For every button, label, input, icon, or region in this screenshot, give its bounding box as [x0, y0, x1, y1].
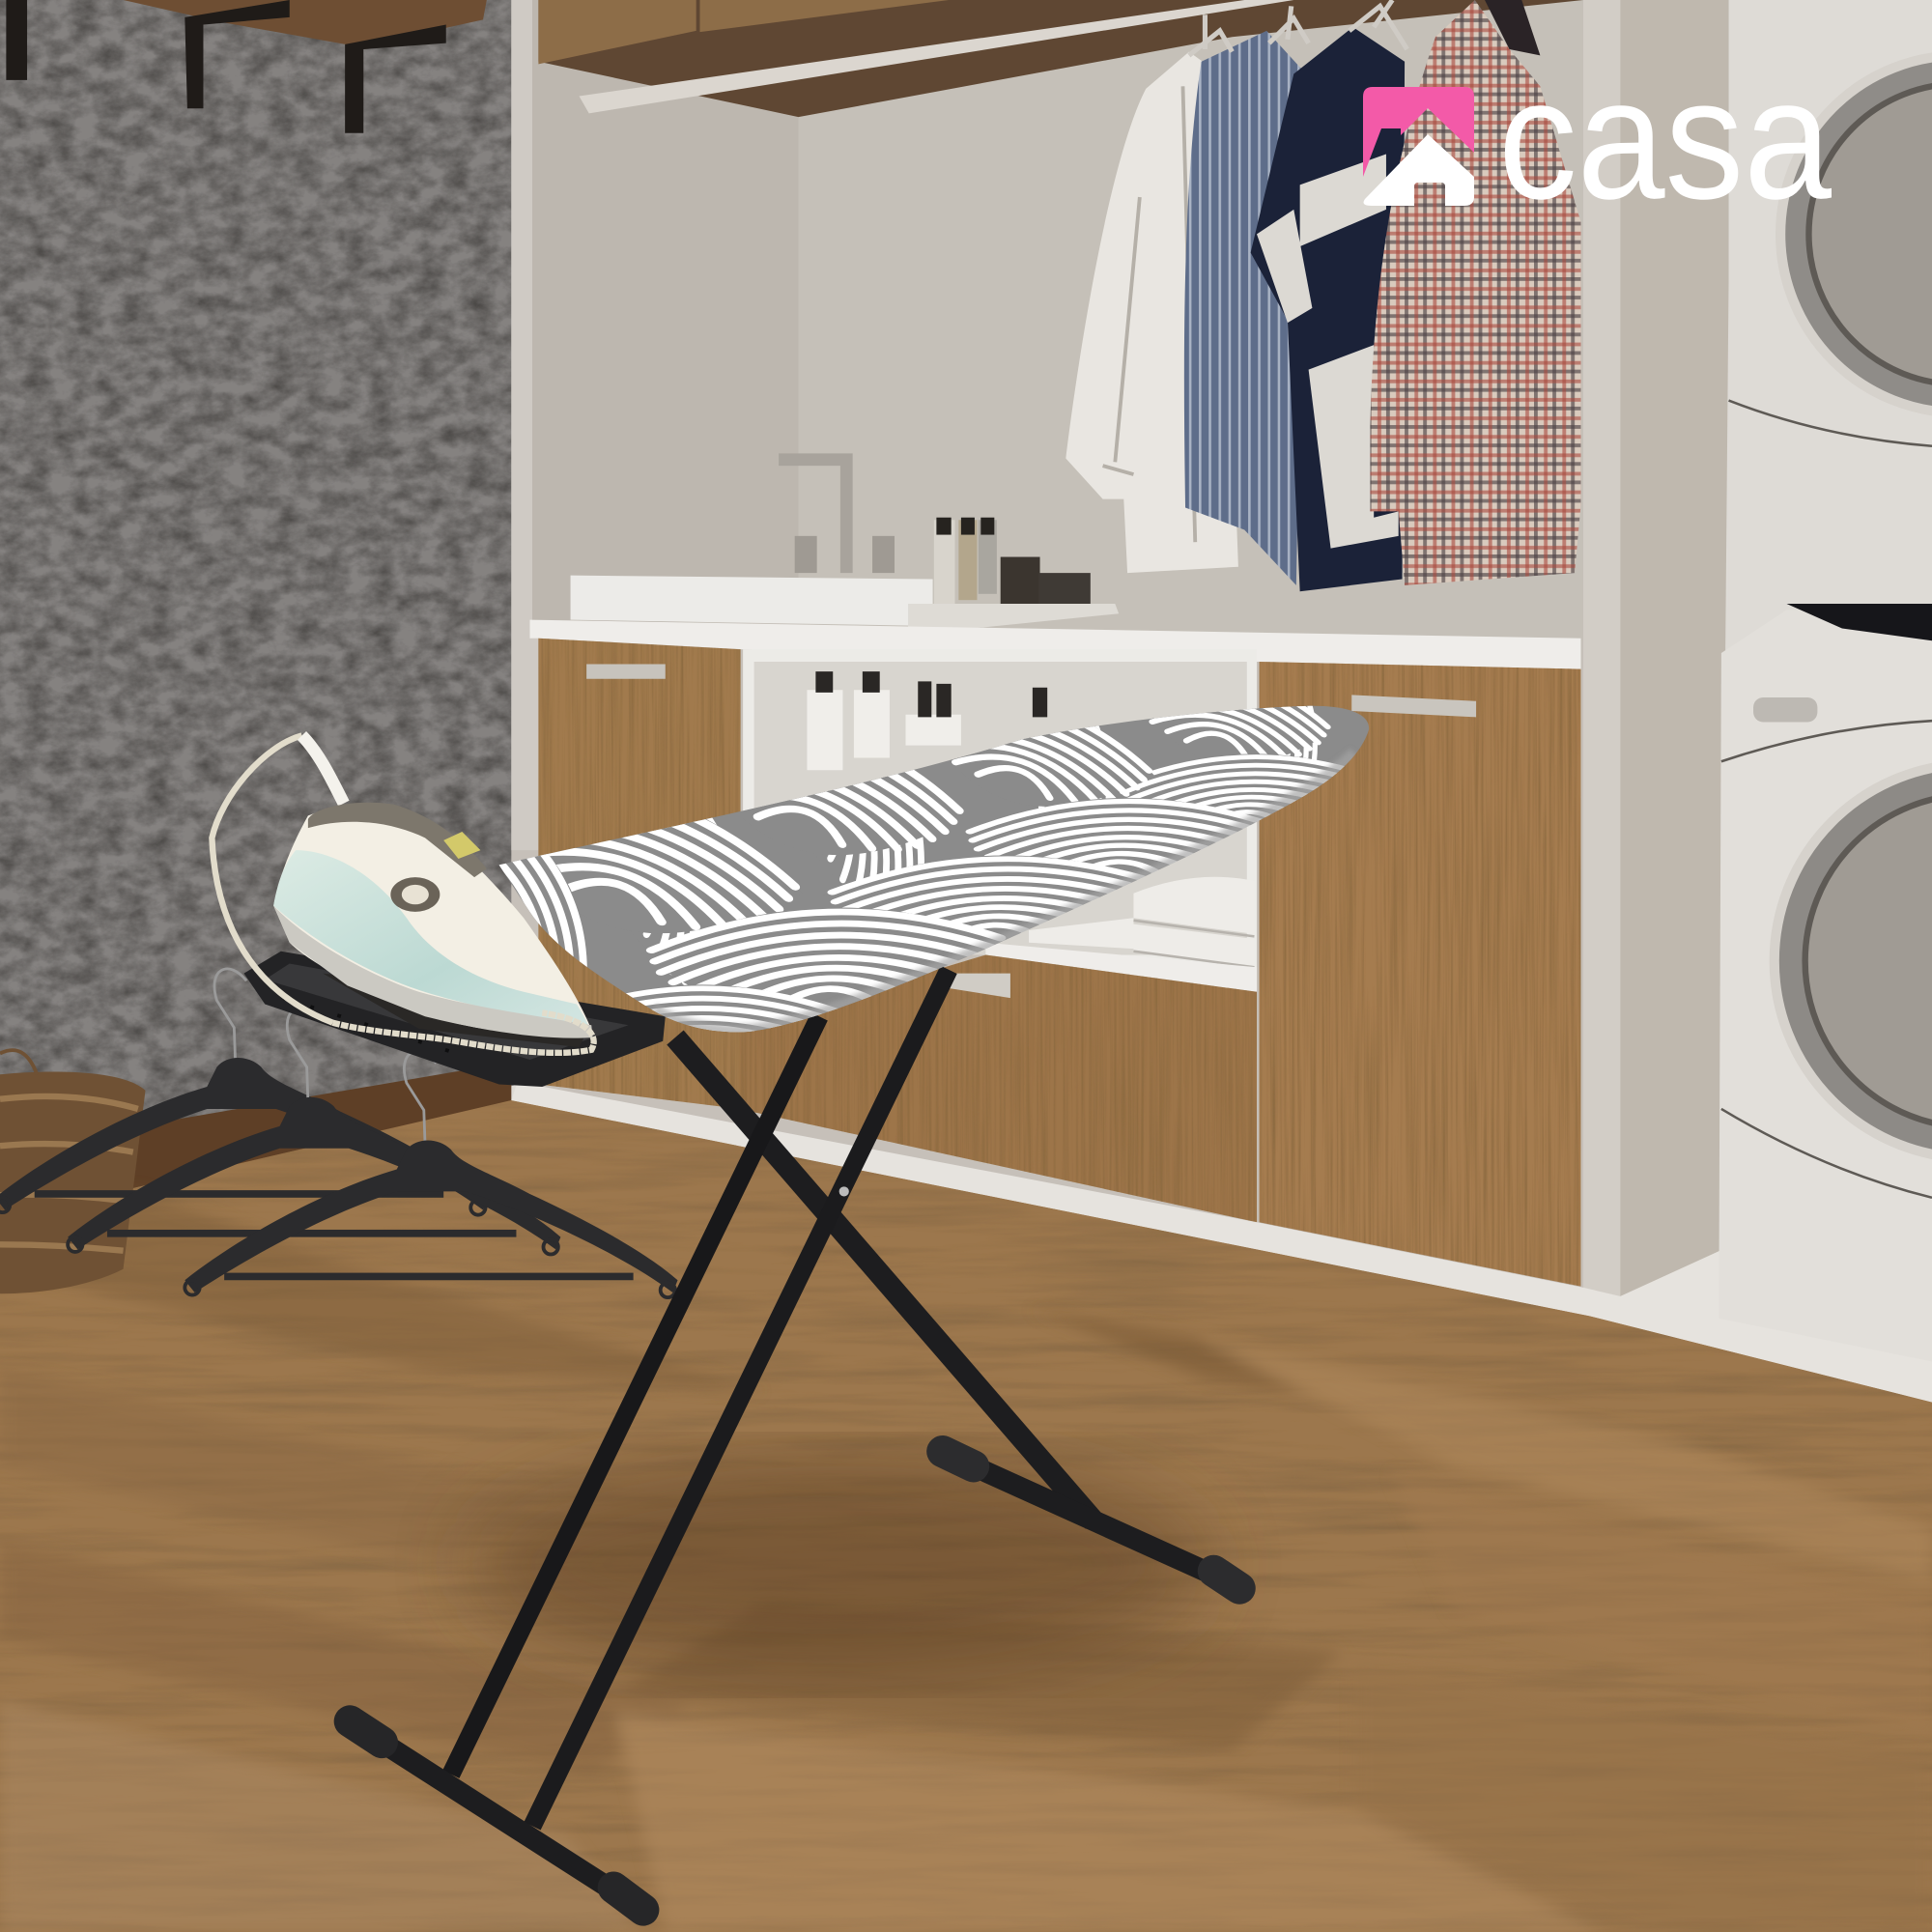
countertop: [529, 620, 1580, 669]
iron body: [273, 804, 593, 1035]
blue striped shirt: [1184, 31, 1306, 585]
upper cabinet: [538, 0, 1583, 117]
logo wordmark: casa: [1498, 43, 1832, 235]
sink and faucet: [571, 453, 933, 626]
board edge shading: [653, 754, 1355, 1032]
casa logo: [1363, 43, 1832, 235]
cord coil on rest: [332, 1012, 594, 1053]
wicker basket: [0, 1050, 146, 1293]
black hangers: [0, 969, 678, 1297]
plaid shirt: [1370, 0, 1580, 585]
clothes hangers: [1189, 0, 1407, 55]
white baseboard: [511, 1082, 1932, 1403]
wood baseboard: [129, 1062, 511, 1189]
folded towels: [1029, 877, 1254, 967]
open niche: [743, 649, 1257, 992]
temperature dial: [390, 877, 440, 912]
steam iron: [212, 735, 593, 1047]
niche bottles: [807, 690, 961, 770]
front leg right: [532, 970, 949, 1826]
bottles and tray: [908, 518, 1119, 629]
iron handle: [308, 803, 487, 877]
hanging clothes: [1065, 0, 1580, 591]
left alcove pillar: [511, 0, 538, 850]
front foot: [352, 1722, 643, 1910]
left alcove wall: [532, 0, 799, 622]
rear leg: [675, 1037, 1094, 1521]
rear foot: [947, 1454, 1233, 1583]
water tank: [273, 850, 589, 1029]
floor planks: [0, 1189, 1932, 1932]
upper washer: [1729, 0, 1932, 616]
front leg left: [451, 1016, 819, 1775]
concrete wall: [0, 0, 518, 1233]
iron rest: [244, 952, 666, 1087]
white sweatshirt: [1065, 52, 1238, 573]
alcove back wall: [511, 0, 1589, 1293]
soleplate: [323, 974, 589, 1047]
left cabinet: [538, 639, 741, 1109]
power cord: [212, 735, 332, 1023]
floor shadow: [469, 1454, 1208, 1676]
right cabinet: [1260, 662, 1580, 1287]
logo icon: pink roof: [1363, 87, 1474, 177]
floor: [0, 1100, 1932, 1932]
right pillar: [1583, 0, 1731, 1300]
center cabinet: [739, 955, 1257, 1222]
wall shelf: [6, 0, 487, 133]
logo icon: white house: [1364, 134, 1474, 206]
back wall: [799, 0, 1583, 640]
ironing board frame: [350, 970, 1239, 1910]
ironing board: [498, 705, 1370, 1032]
swirl cover pattern: [498, 705, 1345, 1032]
lower washer: [1719, 604, 1932, 1361]
navy striped shirt: [1251, 27, 1405, 591]
